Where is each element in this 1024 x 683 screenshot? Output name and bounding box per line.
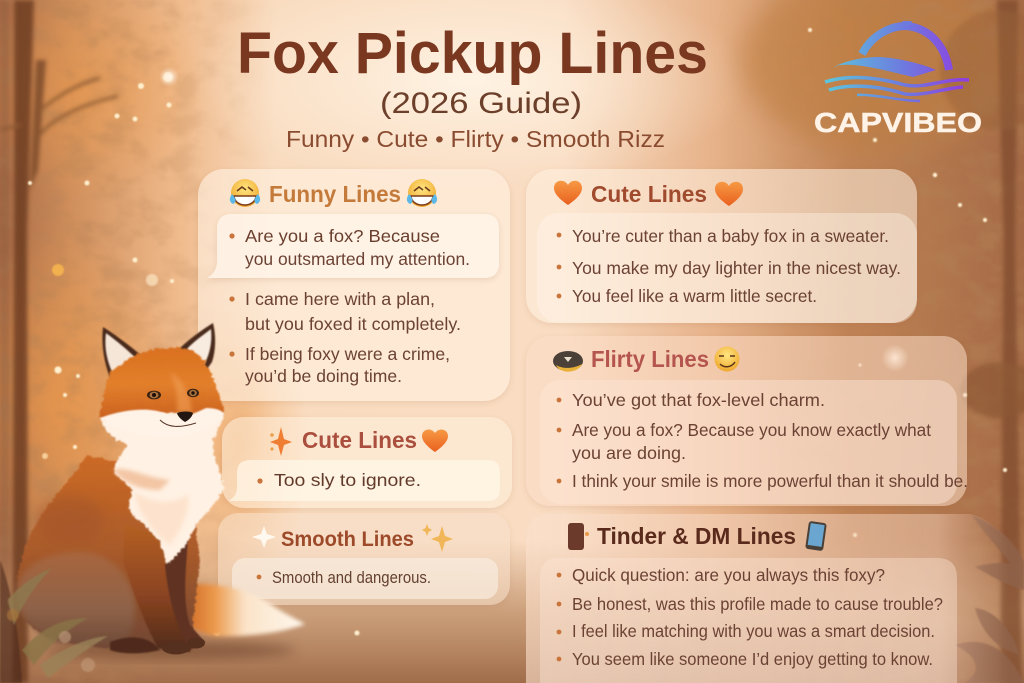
title: Fox Pickup Lines bbox=[237, 21, 708, 86]
funny line 2: I came here with a plan, bbox=[245, 289, 435, 309]
tinder list: You seem like someone I’d enjoy getting to know. bbox=[572, 649, 933, 669]
bubble: smooth and dangerous: Smooth and dangerous. bbox=[272, 569, 431, 587]
icon: laughing emoji left bbox=[230, 179, 260, 207]
heading: funny lines: Funny Lines bbox=[269, 181, 401, 207]
cute list: You make my day lighter in the nicest way. bbox=[572, 258, 901, 278]
panel: flirty lines bbox=[526, 336, 968, 506]
fox face details bbox=[147, 389, 199, 426]
tinder list bbox=[557, 565, 943, 669]
flirty list: You’ve got that fox-level charm. bbox=[572, 390, 825, 410]
heading: cute lines right: Cute Lines bbox=[591, 181, 707, 207]
fox head bbox=[99, 347, 224, 438]
cute list bbox=[557, 226, 901, 306]
funny line 2: but you foxed it completely. bbox=[245, 314, 461, 334]
funny line 3: If being foxy were a crime, bbox=[245, 344, 450, 364]
fox tail bbox=[180, 584, 305, 636]
right tree trunk and foliage bbox=[940, 0, 1024, 683]
funny line 3: you’d be doing time. bbox=[245, 366, 402, 386]
heading: flirty lines: Flirty Lines bbox=[591, 346, 709, 372]
panel: smooth lines bbox=[218, 513, 510, 605]
icon: blue phone bbox=[805, 521, 827, 551]
icon: heart left bbox=[554, 181, 582, 205]
speech bubble: too sly bbox=[228, 460, 500, 501]
panel: funny lines bbox=[198, 169, 510, 401]
speech bubble: first funny line: you outsmarted my attention. bbox=[245, 249, 470, 269]
heading: smooth lines: Smooth Lines bbox=[281, 528, 414, 551]
flirty list: Are you a fox? Because you know exactly what bbox=[572, 420, 931, 440]
speech bubble: first funny line: Are you a fox? Because bbox=[245, 226, 440, 246]
left tree trunks bbox=[0, 0, 118, 683]
fox body bbox=[17, 455, 205, 654]
fox illustration bbox=[17, 323, 305, 659]
icon: dark emoji bbox=[553, 351, 583, 372]
speech bubble: too sly: Too sly to ignore. bbox=[274, 470, 421, 490]
flirty list: you are doing. bbox=[572, 443, 686, 463]
icon: heart right bbox=[715, 182, 743, 206]
icon: white sparkle bbox=[252, 526, 276, 548]
funny line 3 bbox=[229, 344, 450, 386]
icon: orange heart bbox=[422, 429, 448, 452]
flirty list bbox=[557, 390, 968, 491]
icon: gold sparkles bbox=[422, 524, 453, 552]
icon: orange sparkle bbox=[270, 427, 292, 456]
fox ears bbox=[102, 323, 215, 382]
cute list: You feel like a warm little secret. bbox=[572, 286, 817, 306]
flirty list: I think your smile is more powerful than it should be. bbox=[572, 471, 968, 491]
foreground grass bbox=[0, 560, 108, 683]
subtitle: guide year: (2026 Guide) bbox=[380, 87, 582, 120]
cute list: You’re cuter than a baby fox in a sweater. bbox=[572, 226, 889, 246]
logo: CapVibeo bbox=[814, 21, 982, 138]
tagline: Funny • Cute • Flirty • Smooth Rizz bbox=[286, 126, 665, 152]
bubble: smooth and dangerous bbox=[232, 558, 498, 599]
icon: laughing emoji right bbox=[407, 179, 437, 207]
panel: cute lines right bbox=[526, 169, 917, 323]
speech bubble: first funny line bbox=[207, 214, 499, 278]
tinder list: I feel like matching with you was a smart decision. bbox=[572, 621, 935, 641]
fox chest ruff bbox=[100, 405, 224, 565]
right foreground leaves bbox=[955, 515, 1024, 683]
tinder list: Quick question: are you always this foxy? bbox=[572, 565, 885, 585]
heading: tinder and dm lines: Tinder & DM Lines bbox=[597, 523, 796, 549]
tinder list: Be honest, was this profile made to cause trouble? bbox=[572, 594, 943, 614]
funny line 2 bbox=[229, 289, 461, 334]
icon: dark phone bbox=[568, 523, 589, 550]
icon: smirk emoji bbox=[714, 346, 740, 372]
logo: CapVibeo: CAPVIBEO bbox=[814, 107, 982, 138]
heading: cute lines: Cute Lines bbox=[302, 427, 417, 453]
panel: cute lines small bbox=[222, 417, 512, 508]
panel: tinder and dm lines bbox=[526, 514, 1010, 683]
